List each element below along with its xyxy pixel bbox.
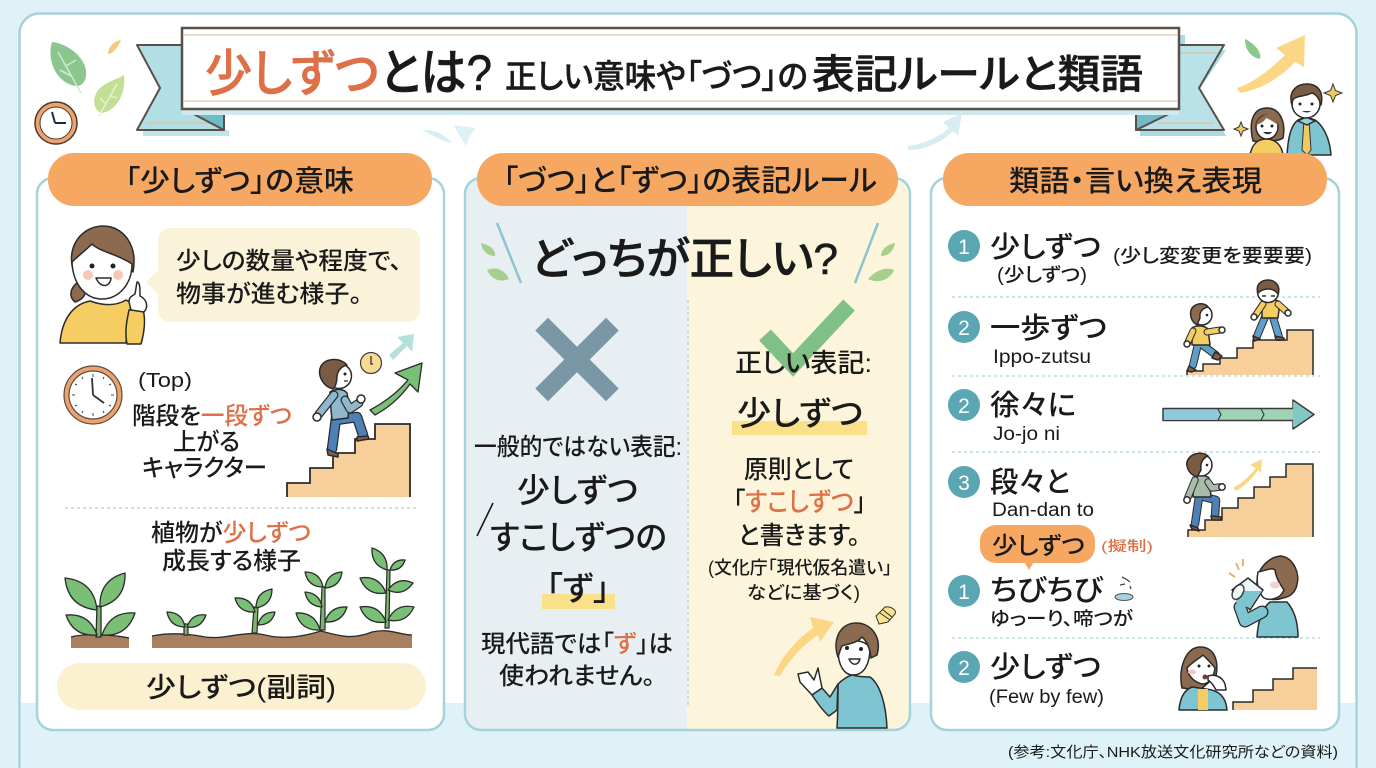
icon: small clock [35, 102, 77, 144]
synonym 6: 2 [958, 657, 970, 680]
synonym 6: 少しずつ [990, 651, 1101, 684]
title banner [182, 28, 1179, 115]
heading pill: rule [477, 153, 898, 206]
title text: とは? [380, 45, 492, 101]
illustration: person drinking [1229, 556, 1298, 637]
text: correct notation: と書きます。 [738, 522, 860, 550]
synonym 6: (Few by few) [989, 687, 1104, 708]
heading pill: meaning [48, 153, 432, 206]
callout: sub-heading pill: 少しずつ [992, 533, 1085, 560]
synonym 1: 1 [958, 236, 970, 259]
synonym 4 [948, 466, 1094, 521]
title text: 正しい意味や「づつ」の [505, 58, 808, 95]
text: incorrect notation [474, 434, 682, 690]
heading pill: rule: 「づつ」と「ずつ」の表記ルール [503, 165, 877, 198]
illustration: two people on stairs [1184, 280, 1313, 375]
synonym 3 [948, 389, 1076, 445]
text: correct notation: 原則として [744, 456, 854, 484]
text: incorrect notation: 一般的ではない表記: [474, 434, 682, 461]
illustration: large plant [65, 573, 135, 648]
label pill: adverb: 少しずつ(副詞) [146, 673, 336, 703]
heading pill: meaning: 「少しずつ」の意味 [125, 165, 354, 198]
synonym 4: 3 [958, 472, 970, 495]
text: stairs caption: キャラクター [142, 455, 267, 482]
text: stairs caption [132, 370, 292, 482]
speech bubble [146, 228, 420, 322]
synonym 4: Dan-dan to [992, 500, 1094, 521]
question heading: どっちが正しい? [531, 235, 838, 284]
title text: 少しずつ [205, 46, 379, 102]
synonym 3: 徐々に [990, 389, 1076, 422]
text: plant caption: 植物が少しずつ [151, 520, 311, 547]
text: incorrect notation: 使われません。 [499, 663, 655, 690]
callout: sub-heading pill [980, 525, 1153, 570]
synonym 5: ゆっーり、啼つが [990, 608, 1133, 630]
text: stairs caption: (Top) [138, 370, 192, 392]
callout: sub-heading pill: (擬制) [1101, 538, 1153, 554]
icon: clock [64, 366, 122, 424]
synonym 6 [948, 651, 1104, 708]
synonym 1: (少しずつ) [997, 264, 1087, 286]
text: correct notation: (文化庁「現代仮名遣い」 [708, 558, 892, 578]
title ribbon right [1136, 35, 1226, 136]
text: incorrect notation: 少しずつ [517, 472, 638, 509]
illustration: woman eating and stairs [1179, 647, 1317, 710]
synonym 5: 1 [958, 581, 970, 604]
text: plant caption [151, 520, 311, 575]
panel: synonyms [931, 153, 1339, 730]
illustration: man with arrow [774, 607, 895, 728]
synonym 1: (少し変変更を要要要) [1113, 245, 1312, 267]
faint decorative arrows [422, 113, 962, 150]
synonym 5: ちびちび [990, 574, 1104, 607]
illustration: gradual arrow [1163, 400, 1314, 429]
text: incorrect notation: すこしずつの [490, 519, 667, 556]
heading pill: synonyms: 類語・言い換え表現 [1009, 165, 1262, 198]
title text: 表記ルールと類語 [812, 53, 1143, 97]
text: plant caption: 成長する様子 [162, 548, 301, 575]
text: correct notation: 「すこしずつ」 [733, 487, 866, 517]
icon: green leaves [50, 40, 124, 116]
synonym 3: 2 [958, 395, 970, 418]
title ribbon left [137, 45, 229, 136]
synonym 2 [948, 311, 1107, 368]
speech bubble: 物事が進む様子。 [176, 281, 362, 308]
text: stairs caption: 上がる [173, 429, 240, 456]
title text [205, 45, 1143, 102]
panel: meaning [37, 153, 444, 730]
illustration: character climbing stairs [287, 334, 422, 497]
synonym 4: 段々と [990, 466, 1070, 499]
text: incorrect notation: 現代語では「ず」は [481, 631, 673, 658]
speech bubble: 少しの数量や程度で、 [176, 248, 402, 275]
text: correct notation: 少しずつ [737, 395, 863, 432]
text: stairs caption: 階段を一段ずつ [132, 403, 292, 430]
heading pill: synonyms [943, 153, 1327, 206]
text: correct notation: 正しい表記: [735, 348, 872, 378]
icon: rising arrow and couple [1234, 35, 1342, 155]
synonym 5 [948, 574, 1133, 630]
icon: check [765, 305, 849, 365]
label pill: adverb [57, 663, 426, 710]
illustration: growing plants [152, 548, 414, 648]
icon: cross [548, 330, 606, 388]
synonym 2: 一歩ずつ [990, 312, 1107, 345]
synonym 1 [948, 230, 1312, 286]
synonym 3: Jo-jo ni [993, 424, 1060, 445]
text: correct notation [708, 348, 892, 603]
synonym 1: 少しずつ [990, 231, 1101, 264]
text: incorrect notation: 「ず」 [546, 570, 610, 607]
illustration: person climbing tall stairs [1184, 453, 1313, 537]
text: correct notation: などに基づく) [747, 583, 860, 603]
synonym 2: Ippo-zutsu [993, 347, 1091, 368]
synonym 2: 2 [958, 317, 970, 340]
question heading [481, 223, 895, 284]
source footnote: (参考:文化庁、NHK放送文化研究所などの資料) [1008, 744, 1338, 761]
illustration: woman pointing [60, 226, 147, 344]
panel: notation rule [465, 153, 910, 730]
